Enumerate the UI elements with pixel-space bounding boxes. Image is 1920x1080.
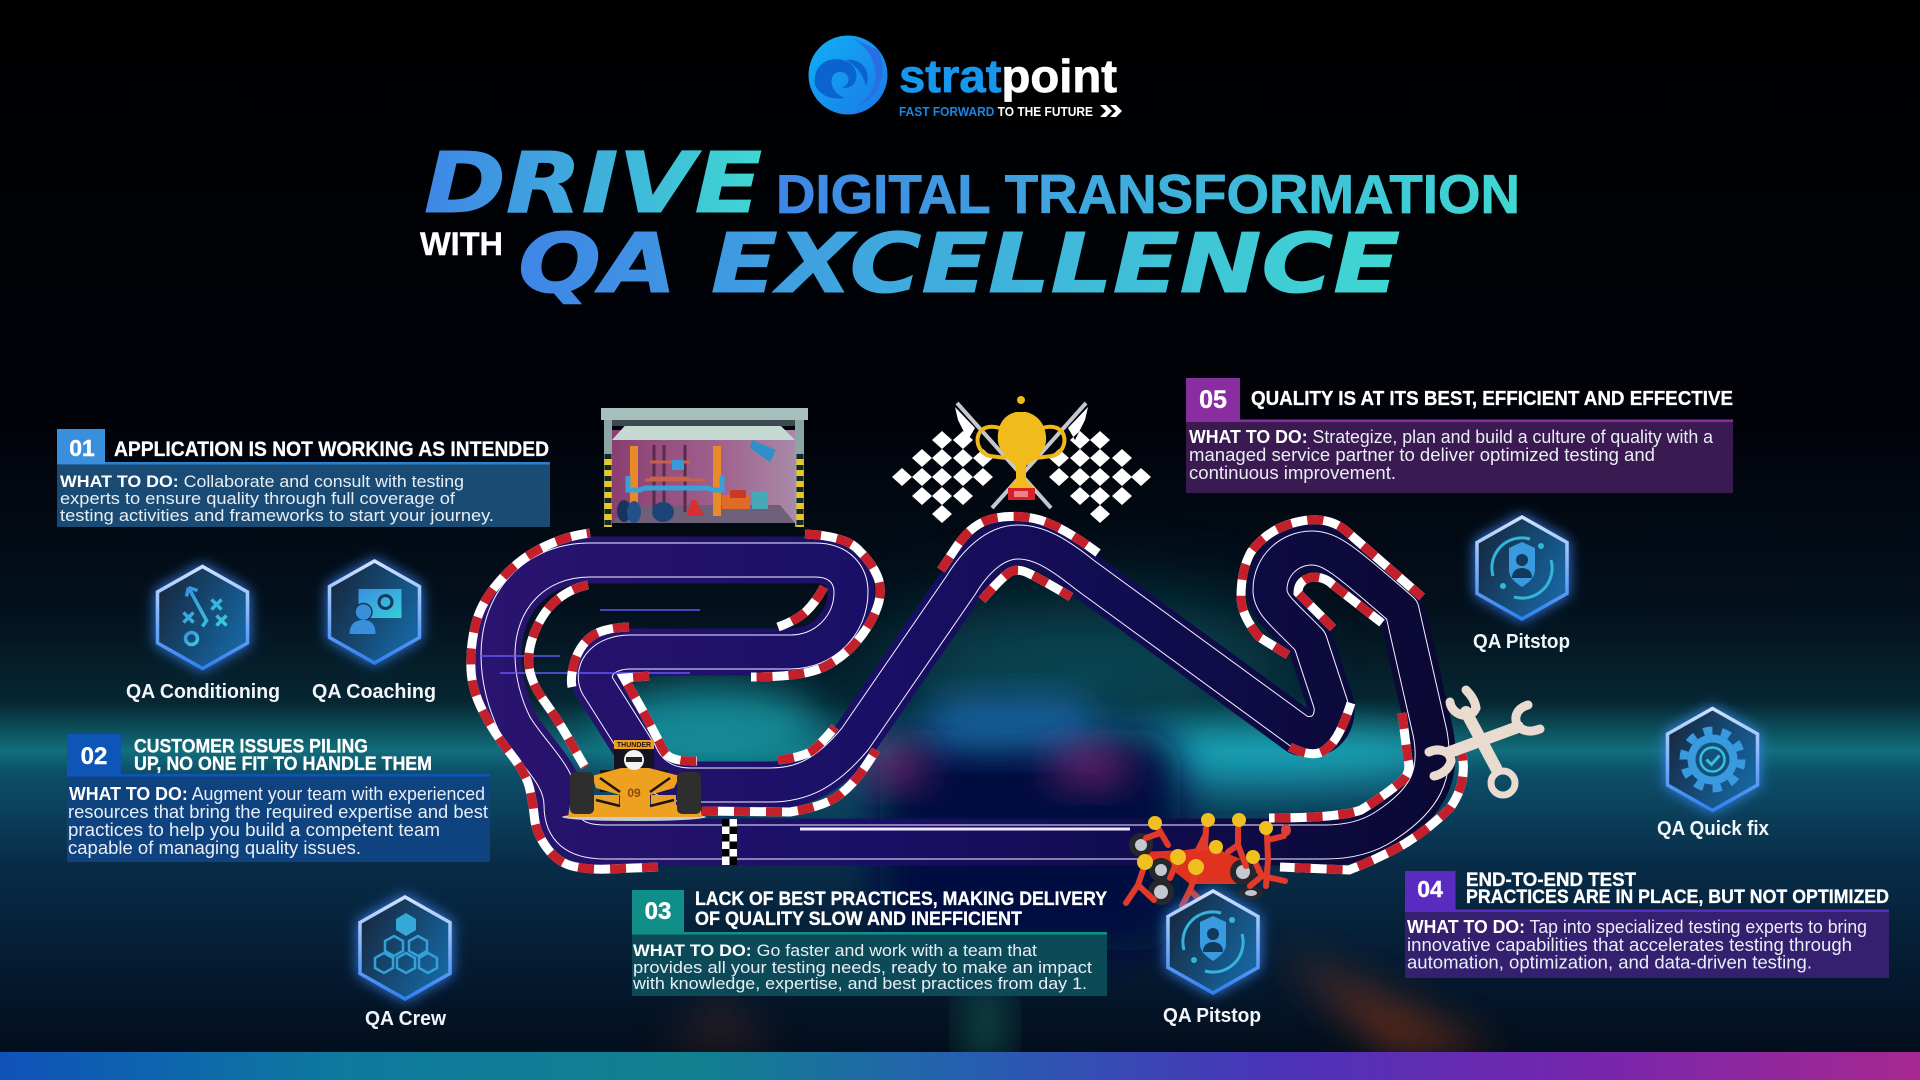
title words: qa excellence: QA EXCELLENCE	[518, 217, 1400, 312]
body 02: capable of managing quality issues.	[68, 838, 361, 858]
number badge 03	[632, 890, 684, 933]
pit crew	[1126, 813, 1291, 906]
body 04: innovative capabilities that accelerates testing through	[1407, 935, 1852, 955]
garage tires, jack and boxes	[617, 490, 768, 523]
logo wordmark: stratpoint	[899, 50, 1117, 102]
heading 04	[1466, 870, 1889, 908]
hexagon badge	[330, 561, 420, 663]
track kerbs	[471, 516, 1463, 870]
hexagon badge	[1477, 517, 1567, 619]
heading 01: APPLICATION IS NOT WORKING AS INTENDED	[114, 438, 549, 461]
body 05: managed service partner to deliver optimized testing and	[1189, 445, 1655, 465]
car rear tires	[570, 772, 701, 814]
body 03: provides all your testing needs, ready to make an impact	[633, 958, 1092, 977]
pit car	[1141, 846, 1258, 884]
heading 02: UP, NO ONE FIT TO HANDLE THEM	[134, 754, 432, 775]
body 04	[1407, 917, 1867, 972]
body 02: WHAT TO DO: Augment your team with experienced	[69, 784, 485, 804]
service: qa crew	[360, 897, 450, 1030]
heading 03	[695, 889, 1107, 930]
panel 01	[57, 429, 550, 527]
pit crew bodies	[1126, 828, 1285, 906]
body 02: resources that bring the required expertise and best	[68, 802, 488, 822]
number badge 03: 03	[645, 898, 671, 925]
body 04: automation, optimization, and data-driven testing.	[1407, 952, 1812, 972]
pit crew tires	[1129, 833, 1263, 905]
trophy	[978, 396, 1064, 500]
start finish line	[722, 819, 737, 865]
body 01	[60, 472, 494, 525]
heading 04: PRACTICES ARE IN PLACE, BUT NOT OPTIMIZED	[1466, 887, 1889, 908]
number badge 04: 04	[1417, 876, 1443, 902]
number badge 05: 05	[1199, 386, 1227, 414]
number badge 02	[67, 734, 121, 775]
hexagon badge	[1668, 708, 1758, 810]
logo mark	[808, 36, 888, 114]
title word: drive: DRIVE	[424, 134, 762, 232]
heading 03: LACK OF BEST PRACTICES, MAKING DELIVERY	[695, 889, 1107, 910]
body 02	[68, 784, 488, 858]
bottom gradient bar	[0, 1052, 1920, 1080]
body 05: continuous improvement.	[1189, 463, 1396, 483]
service: qa pitstop bottom	[1163, 891, 1261, 1027]
body 05: WHAT TO DO: Strategize, plan and build a culture of quality with a	[1189, 427, 1714, 447]
garage shelves and lift	[628, 440, 776, 516]
heading 02	[134, 736, 432, 775]
number badge 04	[1405, 871, 1456, 910]
flag poles	[957, 403, 1086, 508]
trophy and checkered flags	[892, 396, 1151, 523]
hexagon badge	[360, 897, 450, 999]
logo chevrons	[1100, 105, 1122, 117]
panel 03	[632, 889, 1107, 996]
body 04: WHAT TO DO: Tap into specialized testing experts to bring	[1407, 917, 1867, 937]
car labels: THUNDER	[617, 742, 651, 749]
service: qa quick fix	[1657, 708, 1769, 840]
label: QA Crew	[365, 1008, 446, 1030]
logo	[808, 36, 1122, 119]
race car: 09	[627, 786, 641, 800]
hexagon badge	[1168, 891, 1258, 993]
panel 02	[67, 734, 490, 862]
body 03	[632, 941, 1092, 993]
heading 04: END-TO-END TEST	[1466, 870, 1636, 891]
heading 02: CUSTOMER ISSUES PILING	[134, 736, 368, 758]
label: QA Coaching	[312, 681, 436, 703]
label: QA Pitstop	[1473, 631, 1570, 653]
left checkered flag	[892, 407, 993, 523]
label: QA Pitstop	[1163, 1005, 1261, 1027]
right checkered flag	[1049, 407, 1151, 523]
service: qa conditioning	[126, 566, 280, 703]
wrench icon	[1429, 690, 1540, 795]
pit crew helmets	[1137, 813, 1273, 875]
heading 05: QUALITY IS AT ITS BEST, EFFICIENT AND EFFECTIVE	[1251, 388, 1733, 410]
number badge 01	[57, 429, 105, 464]
body 05	[1189, 427, 1714, 483]
title words: digital transformation: DIGITAL TRANSFORMATION	[776, 163, 1520, 225]
service: qa coaching	[312, 561, 436, 703]
garage	[601, 408, 808, 527]
number badge 01: 01	[69, 435, 95, 461]
body 01: testing activities and frameworks to start your journey.	[60, 506, 494, 525]
body 01: WHAT TO DO: Collaborate and consult with testing	[60, 472, 464, 491]
body 01: experts to ensure quality through full coverage of	[60, 489, 455, 508]
service: qa pitstop top	[1473, 517, 1570, 653]
label: QA Conditioning	[126, 681, 280, 703]
title word: with: WITH	[420, 226, 503, 262]
label: QA Quick fix	[1657, 818, 1769, 840]
title	[420, 134, 1520, 312]
number badge 02: 02	[81, 743, 107, 770]
panel 04	[1405, 870, 1889, 978]
heading 03: OF QUALITY SLOW AND INEFFICIENT	[695, 909, 1022, 930]
body 02: practices to help you build a competent team	[68, 820, 440, 840]
body 03: with knowledge, expertise, and best practices from day 1.	[632, 974, 1087, 993]
panel 05	[1186, 378, 1733, 493]
logo tagline: FAST FORWARD TO THE FUTURE	[899, 105, 1093, 119]
race track	[471, 516, 1463, 870]
number badge 05	[1186, 378, 1240, 420]
body 03: WHAT TO DO: Go faster and work with a team that	[633, 941, 1037, 960]
race car	[562, 740, 706, 821]
hexagon badge	[158, 566, 248, 668]
